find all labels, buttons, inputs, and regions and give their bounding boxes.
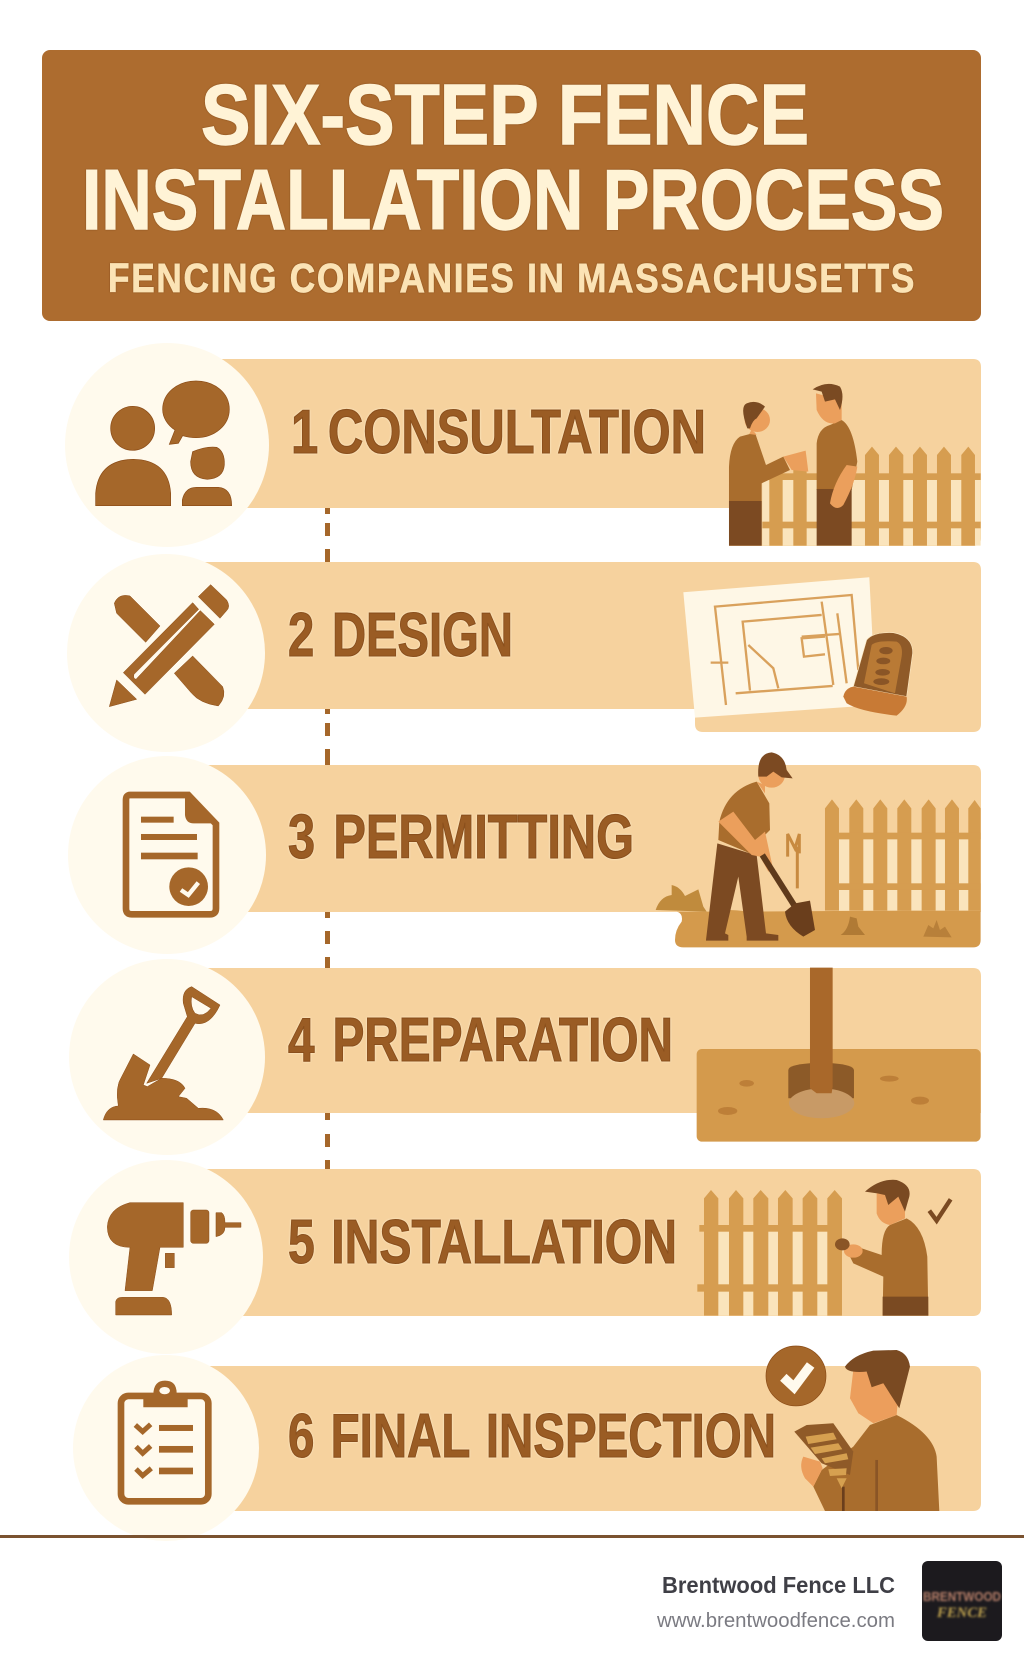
dashed connector line — [325, 508, 330, 1169]
step 4: preparation — [69, 959, 981, 1155]
circle 6 — [73, 1355, 259, 1541]
checkmark — [929, 1199, 951, 1221]
icon: pencil and ruler — [109, 585, 229, 707]
title line 1: SIX-STEP FENCE — [201, 68, 809, 163]
grass — [923, 920, 952, 937]
illustration: man checking fence — [697, 1180, 951, 1316]
circle 5 — [69, 1160, 263, 1354]
blueprint — [683, 577, 876, 718]
header panel — [42, 50, 981, 321]
icon: power drill — [107, 1203, 241, 1315]
fence — [697, 1190, 842, 1316]
footer divider — [0, 1535, 1024, 1538]
step 6: final inspection — [73, 1346, 981, 1541]
logo — [922, 1561, 1002, 1641]
icon: people talking — [96, 381, 232, 506]
fence — [762, 447, 981, 546]
illustration: two men at fence — [729, 384, 981, 546]
illustration: post in hole — [697, 968, 981, 1142]
worker — [835, 1180, 928, 1316]
inspector figure — [813, 1350, 939, 1511]
ground — [675, 910, 981, 947]
illustration: inspector — [766, 1346, 939, 1511]
footer website: www.brentwoodfence.com — [656, 1610, 895, 1632]
step 6 label: 6 FINAL INSPECTION — [288, 1402, 776, 1471]
circle 2 — [67, 554, 265, 752]
icon: shovel in dirt — [103, 987, 223, 1120]
step 5 label: 5 INSTALLATION — [288, 1208, 677, 1277]
illustration: man digging by fence — [656, 752, 981, 947]
bush — [656, 885, 707, 912]
stump — [841, 917, 865, 935]
circle 1 — [65, 343, 269, 547]
band 6 — [166, 1366, 981, 1511]
footer company name: Brentwood Fence LLC — [662, 1572, 895, 1598]
hole — [788, 1063, 854, 1098]
man right — [813, 384, 857, 546]
ground panel — [697, 1049, 981, 1142]
step 3: permitting — [68, 752, 981, 954]
tablet device — [843, 633, 913, 716]
step 2: design — [67, 554, 981, 752]
step 3 label: 3 PERMITTING — [288, 803, 634, 872]
circle 3 — [68, 756, 266, 954]
fence — [825, 799, 981, 911]
circle 4 — [69, 959, 265, 1155]
step 2 label: 2 DESIGN — [288, 601, 513, 670]
step 1 label: 1 CONSULTATION — [291, 398, 706, 467]
band 2 — [166, 562, 981, 732]
digging man — [706, 752, 815, 941]
rocks — [718, 1076, 929, 1115]
clipboard in hand — [794, 1423, 853, 1488]
check badge — [766, 1346, 826, 1406]
step 5: installation — [69, 1160, 981, 1354]
step 4 label: 4 PREPARATION — [288, 1006, 673, 1075]
man left — [729, 402, 808, 546]
band 5 — [166, 1169, 981, 1316]
post — [810, 968, 833, 1093]
logo: BRENTWOOD — [923, 1589, 1001, 1604]
stake — [788, 834, 799, 888]
step 1: consultation — [65, 343, 981, 547]
icon: clipboard checklist — [121, 1381, 208, 1501]
icon: permit document — [126, 793, 218, 914]
logo: FENCE — [936, 1605, 987, 1621]
subtitle: FENCING COMPANIES IN MASSACHUSETTS — [108, 255, 916, 301]
band 3 — [167, 765, 981, 912]
band 4 — [167, 968, 981, 1113]
illustration: blueprint and tablet — [683, 577, 913, 718]
band 1 — [167, 359, 981, 546]
